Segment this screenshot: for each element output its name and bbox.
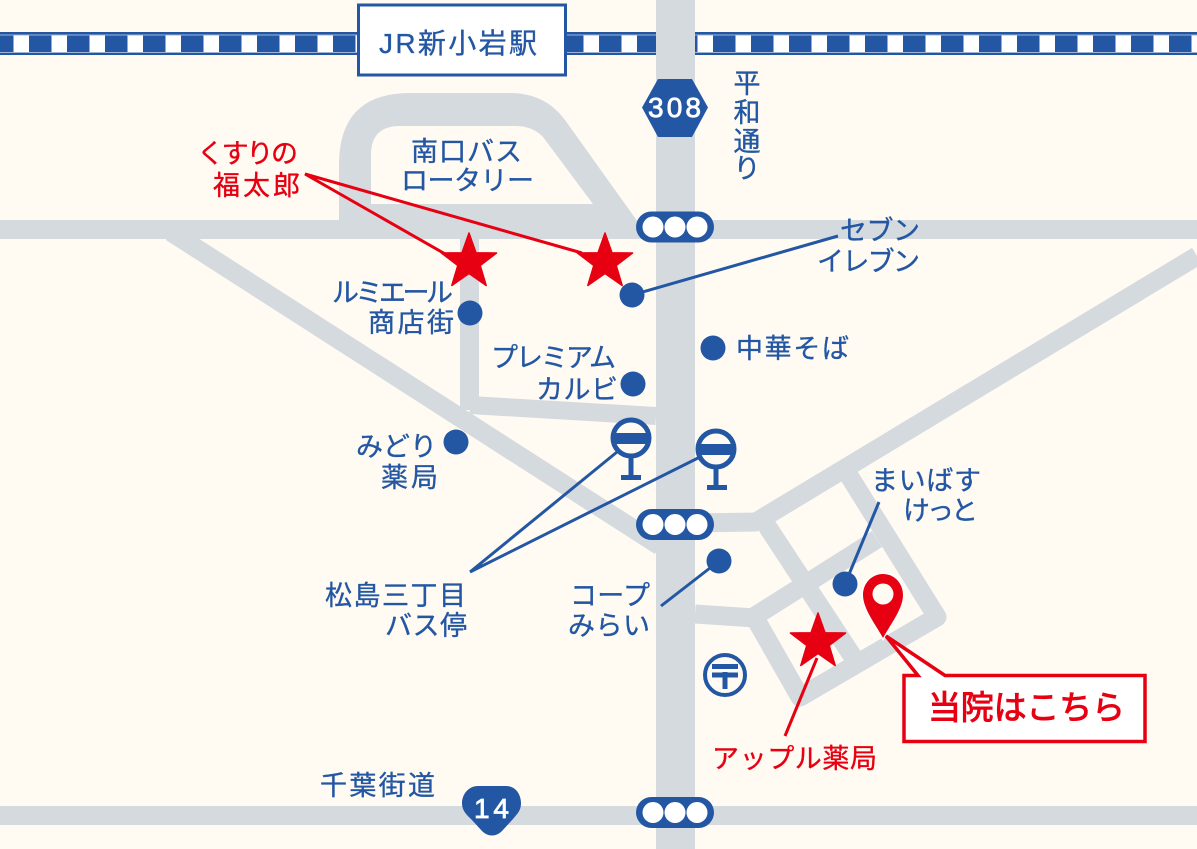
leader line: アップル薬局 [785, 658, 817, 736]
icon: bus stop east [697, 431, 735, 490]
label: 南口バスロータリー [401, 137, 534, 196]
callout: 当院はこちら: 当院はこちら [928, 689, 1125, 726]
shop: プレミアムカルビ: カルビ [536, 375, 618, 405]
station sign: JR新小岩駅 [358, 5, 566, 75]
label: 南口バスロータリー: 南口バス [411, 137, 522, 167]
shop: セブンイレブン: イレブン [817, 247, 920, 277]
label: 松島三丁目バス停: 松島三丁目 [325, 581, 466, 611]
label: 千葉街道: 千葉街道 [320, 771, 435, 801]
star: アップル薬局 [790, 613, 846, 666]
shop: まいばすけっと: けっと [903, 496, 978, 526]
shop: ルミエール商店街: ルミエール [332, 278, 453, 308]
label: くすりの福太郎: 福太郎 [213, 171, 300, 201]
map pin: clinic [863, 574, 903, 638]
road label: 平和通り: 通 [734, 127, 760, 157]
route 14 marker: 14 [474, 793, 509, 824]
route 308 marker: 308 [648, 92, 701, 123]
shop: 中華そば: 中華そば [736, 334, 849, 364]
label: アップル薬局: アップル薬局 [712, 744, 877, 774]
road label: 平和通り [734, 69, 760, 184]
traffic light: south [636, 797, 714, 828]
shop: ルミエール商店街: 商店街 [368, 308, 454, 338]
route 14 marker [462, 786, 521, 836]
shop: まいばすけっと: まいばす [871, 466, 981, 496]
label: 松島三丁目バス停 [325, 581, 467, 641]
traffic light: north [636, 212, 714, 242]
bus stop: 松島三丁目 [325, 420, 735, 641]
shop: セブンイレブン [620, 216, 920, 308]
shop: コープみらい: みらい [568, 611, 650, 641]
road label: 平和通り: り [734, 154, 760, 184]
label: くすりの福太郎: くすりの [197, 139, 298, 169]
shop: コープみらい: コープ [570, 581, 650, 611]
road label: 平和通り: 平 [734, 69, 760, 99]
shop: みどり薬局: 薬局 [381, 463, 438, 493]
leader lines: くすりの福太郎 [305, 174, 582, 255]
shop: みどり薬局: みどり [356, 432, 437, 462]
route 308 marker [642, 79, 708, 137]
shop: プレミアムカルビ: プレミアム [491, 343, 616, 373]
star: くすりの福太郎 east [577, 233, 633, 286]
main road: 平和通り [656, 0, 695, 849]
callout: 当院はこちら [886, 636, 1145, 742]
star: くすりの福太郎 west [441, 233, 497, 286]
shop: ルミエール商店街 [332, 278, 482, 338]
road label: 平和通り: 和 [734, 98, 760, 128]
shop: コープみらい [568, 548, 732, 641]
railway line [0, 32, 1197, 55]
shop: セブンイレブン: セブン [840, 216, 920, 246]
station sign: JR新小岩駅: JR新小岩駅 [379, 28, 537, 59]
shop: まいばすけっと [832, 466, 981, 596]
label: くすりの福太郎 [197, 139, 300, 201]
shop: みどり薬局 [356, 430, 468, 493]
shop: プレミアムカルビ [491, 343, 646, 405]
traffic light: middle [636, 509, 714, 540]
icon: bus stop west [612, 420, 650, 480]
label: 松島三丁目バス停: バス停 [385, 611, 467, 641]
icon: post office [705, 655, 745, 695]
label: 南口バスロータリー: ロータリー [401, 166, 534, 196]
